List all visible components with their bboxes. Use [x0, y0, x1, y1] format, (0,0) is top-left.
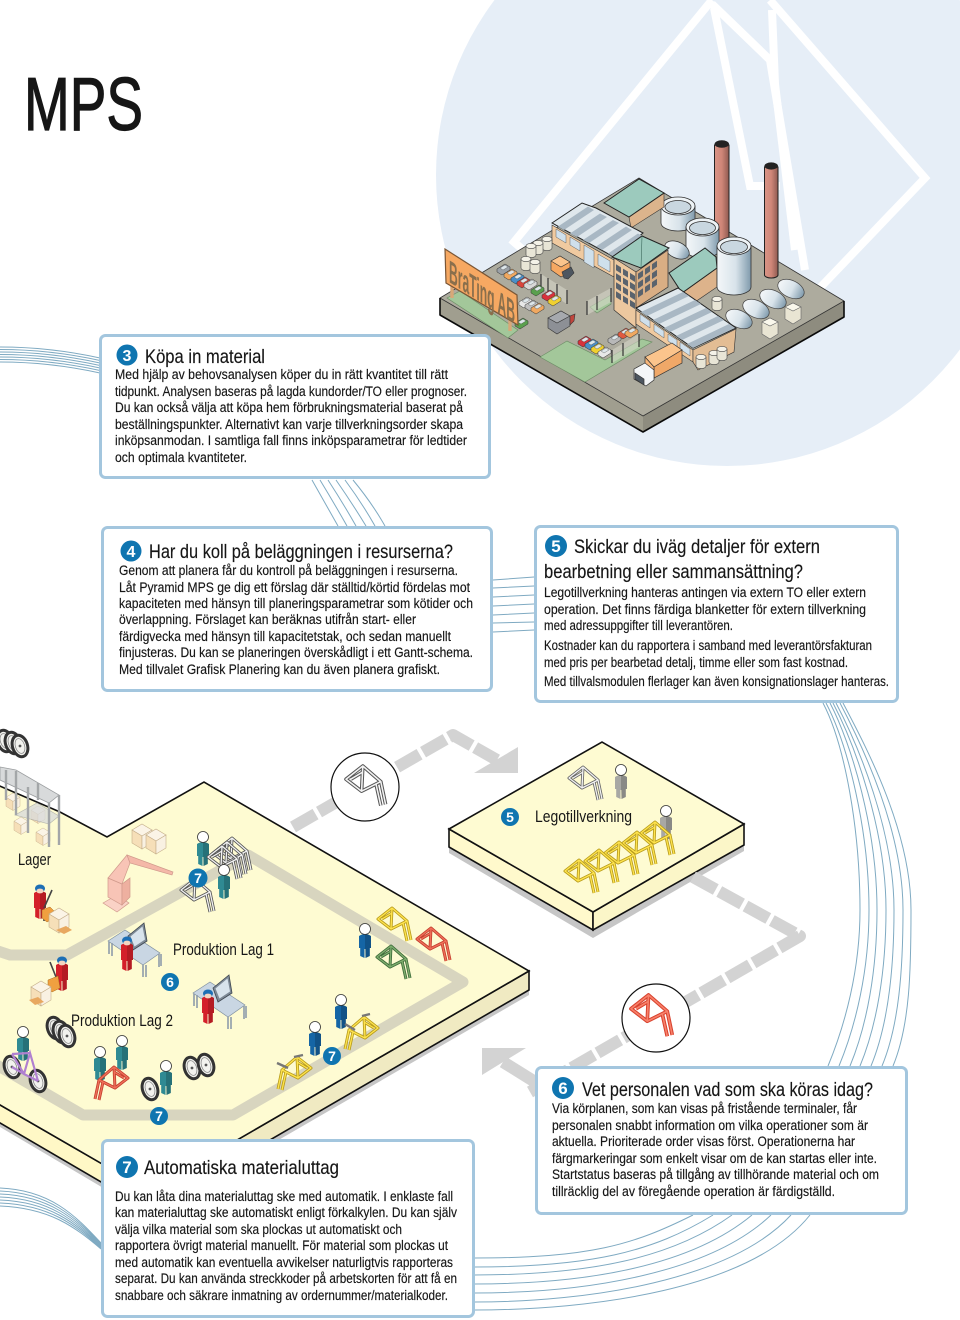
background circle [436, 0, 960, 466]
badge 7 right: 7 [328, 1048, 336, 1064]
badge 5 on plate [501, 808, 519, 826]
tank 2 [686, 218, 719, 258]
text block 4: överlappning. Förslaget kan beräknas utifrån start- eller [119, 612, 416, 627]
floor shadow [0, 990, 529, 1215]
teal workers, red frame and wheels [94, 1036, 217, 1102]
floor platform [0, 782, 529, 1210]
badge 3: 3 [123, 348, 132, 365]
text block 3 [115, 367, 467, 465]
text block 7: med automatik kan eventuella avvikelser naturligtvis rapporteras [115, 1255, 453, 1270]
text block 7: Du kan låta dina materialuttag ske med automatik. I enklaste fall [115, 1189, 453, 1204]
worker with cart, Lager [34, 884, 72, 934]
badge 7: 7 [122, 1158, 132, 1177]
text block 4: Låt Pyramid MPS ge dig ett förslag där ställtid/körtid fördelas mot [119, 580, 470, 595]
text block 6: tillräcklig del av föregående operation är färdigställd. [552, 1184, 835, 1199]
text block 6: aktuella. Prioriterade order visas först. Operationerna har [552, 1134, 855, 1149]
text block 5: Legotillverkning hanteras antingen via extern TO eller extern [544, 585, 866, 600]
badge 6 [552, 1077, 574, 1099]
wheels at Lag 2 [44, 1015, 78, 1049]
curved lines: left to box 3 [0, 347, 100, 373]
badge 7 [116, 1156, 138, 1178]
fences [541, 274, 639, 363]
text block 4: kapaciteten med hänsyn till planeringsparametrar som kötider och [119, 596, 473, 611]
text block 6: Via körplanen, som kan visas på fristående terminaler, får [552, 1101, 857, 1116]
panel: 5 Skickar du iväg detaljer [536, 526, 898, 702]
label: Produktion Lag 2: Produktion Lag 2 [71, 1012, 173, 1030]
transport track [0, 855, 463, 1115]
text block 3: inköpsanmodan. I samtliga fall finns inköpsparametrar för ledtider [115, 433, 467, 448]
panel: 4 Har du koll på beläggningen [102, 528, 492, 690]
heading 6: Vet personalen vad som ska köras idag? [582, 1079, 873, 1101]
subcontracting plate [449, 742, 744, 938]
panel: 3 Köpa in material [100, 336, 490, 478]
curved lines: box 5 to box 6 [823, 703, 911, 1066]
chimney back [714, 140, 729, 245]
curved lines: left to box 7 [0, 1188, 101, 1249]
small orange truck [551, 256, 574, 279]
text block 3: beställningspunkter. Alternativt kan varje tillverkningsorder skapa [115, 417, 463, 432]
text block 5 [544, 585, 889, 689]
heading 4: Har du koll på beläggningen i resurserna? [149, 541, 453, 563]
badge 7 right [323, 1047, 341, 1065]
sign: BraTing AB [445, 249, 518, 331]
label: Legotillverkning: Legotillverkning [535, 808, 632, 826]
text block 6 [552, 1101, 879, 1199]
text block 3: Med hjälp av behovsanalysen köper du in rätt kvantitet till rätt [115, 367, 448, 382]
factory platform [440, 178, 844, 432]
label: Lager: Lager [18, 851, 51, 869]
text block 5: Kostnader kan du rapportera i samband med leverantörsfakturan [544, 638, 872, 653]
badge 4: 4 [127, 544, 136, 561]
dashed arrow to subcontracting [293, 735, 518, 827]
heading 7: Automatiska materialuttag [144, 1157, 339, 1179]
chimney front [764, 162, 778, 278]
text block 4: finjusteras. Du kan se planeringen överskådligt i ett Gantt-schema. [119, 645, 473, 660]
text block 7: välja vilka material som ska plockas ut automatiskt och [115, 1222, 402, 1237]
back green roof [604, 179, 664, 217]
wheels top left [0, 728, 31, 759]
badge 6: 6 [558, 1079, 568, 1098]
circle: grey frame [331, 753, 399, 821]
text block 7 [115, 1189, 457, 1303]
label: Produktion Lag 1: Produktion Lag 1 [173, 941, 274, 959]
office tower [612, 236, 669, 328]
badge 6 [161, 973, 179, 991]
curved lines: box 6 to box 7 [474, 1215, 810, 1310]
production floor [0, 728, 529, 1215]
capsule tank back [662, 237, 692, 263]
desk with operator 1 [108, 923, 161, 977]
parked cars [497, 264, 638, 358]
badge 5: 5 [551, 537, 561, 556]
panel: 7 Automatiska materialuttag [102, 1140, 474, 1316]
badge 7 top: 7 [194, 870, 202, 886]
middle building [669, 248, 717, 302]
text block 7: kan materialuttag ske automatiskt enligt förkalkylen. Du kan själv [115, 1205, 457, 1220]
badge 6: 6 [166, 974, 174, 990]
text block 3: tidpunkt. Analysen baseras på lagda kundorder/TO eller prognoser. [115, 384, 467, 399]
text block 3: Du kan också välja att köpa hem förbrukningsmaterial baserat på [115, 400, 463, 415]
text block 3: och optimala kvantiteter. [115, 450, 247, 465]
cream storage boxes [762, 303, 801, 339]
heading 5: bearbetning eller sammansättning? [544, 561, 803, 583]
barrels [521, 236, 727, 369]
text block 5: med pris per bearbetad detalj, timme eller som fast kostnad. [544, 655, 848, 670]
text block 6: färgmarkeringar som enkelt visar om de kan startas eller inte. [552, 1151, 877, 1166]
heading 5 [544, 536, 820, 583]
text block 4: Genom att planera får du kontroll på beläggningen i resurserna. [119, 563, 458, 578]
text block 6: Startstatus baseras på tillgång av tillhörande material och om [552, 1167, 879, 1182]
workshop right [636, 288, 736, 370]
small grey truck [548, 311, 575, 334]
white logo lines on circle [514, 0, 925, 293]
capsule tanks [723, 275, 807, 333]
badge 7 bottom [150, 1107, 168, 1125]
text block 5: Med tillvalsmodulen flerlager kan även konsignationslager hanteras. [544, 674, 889, 689]
coloured frames, blue worker [359, 908, 450, 979]
badge 5 [545, 535, 567, 557]
text block 5: operation. Det finns färdiga blanketter för extern tillverkning [544, 602, 866, 617]
grey frames with teal workers [181, 832, 251, 912]
text block 6: personalen snabbt information om vilka operationer som är [552, 1118, 868, 1133]
purple bicycle with worker [1, 1026, 49, 1094]
curved lines: box 3 to box 4 [312, 480, 385, 526]
text block 7: rapportera övrigt material manuellt. För material som plockas ut [115, 1238, 448, 1253]
green lawns [447, 291, 652, 382]
grey frame and grey workers [569, 764, 672, 840]
tank 3 [717, 237, 751, 295]
badge 5 on plate: 5 [506, 809, 514, 825]
tank 1 [661, 197, 695, 231]
back building wall [629, 193, 664, 228]
heading 3: Köpa in material [145, 346, 265, 368]
panel: 6 Vet personalen [536, 1068, 906, 1214]
yellow frames with blue workers [277, 994, 378, 1090]
workshop left [552, 203, 644, 277]
factory illustration: BraTing AB [449, 254, 515, 331]
crates [132, 824, 166, 854]
heading 5: Skickar du iväg detaljer för extern [574, 536, 820, 558]
text block 4: färdigvecka med hänsyn till kapacitetstak, och sedan manuellt [119, 629, 451, 644]
badge 7 bottom: 7 [155, 1108, 163, 1124]
text block 7: snabbare och säkrare inmatning av ordernummer/materialkoder. [115, 1288, 448, 1303]
desk with operator 2 [193, 975, 246, 1029]
big orange truck [634, 343, 682, 386]
title: MPS [24, 62, 143, 146]
dashed arrow back to production [482, 877, 800, 1092]
text block 5: med adressuppgifter till leverantören. [544, 618, 733, 633]
badge 7 top [188, 868, 208, 888]
circle: red frame [622, 984, 690, 1052]
badge 3 [116, 344, 138, 366]
storage shelves [0, 767, 59, 847]
text block 4 [119, 563, 473, 677]
row of yellow frames [565, 822, 674, 893]
worker with cart, Lag 2 [29, 956, 68, 1006]
text block 4: Med tillvalet Grafisk Planering kan du även planera grafiskt. [119, 662, 440, 677]
lines: box 4 to box 5 [493, 577, 534, 632]
badge 4 [120, 540, 142, 562]
factory illustration [440, 140, 844, 432]
text block 7: separat. Du kan använda streckkoder på arbetskorten för att få en [115, 1271, 457, 1286]
robot arm [103, 855, 173, 912]
